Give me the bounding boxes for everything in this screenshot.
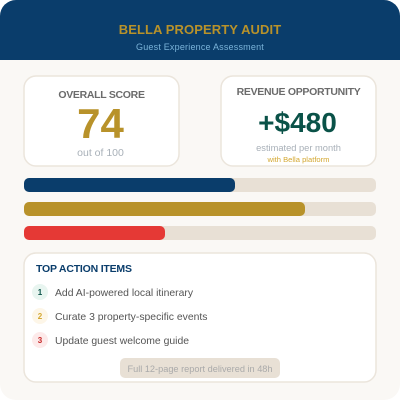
action item 3: 3 bbox=[38, 336, 42, 345]
subtitle: Guest Experience Assessment bbox=[136, 42, 264, 52]
action item 1: Add AI-powered local itinerary bbox=[55, 288, 193, 299]
revenue heading: REVENUE OPPORTUNITY bbox=[237, 86, 360, 98]
bar 1 bbox=[24, 178, 376, 192]
action item 2: 2 bbox=[38, 312, 42, 321]
action item 3: Update guest welcome guide bbox=[55, 336, 189, 347]
title: BELLA PROPERTY AUDIT bbox=[119, 22, 281, 37]
panel: top action items bbox=[23, 252, 377, 383]
report delivery note bbox=[120, 358, 280, 378]
action item 3 bbox=[32, 332, 189, 348]
bar 3 bbox=[24, 226, 376, 240]
panel: revenue opportunity bbox=[220, 75, 377, 167]
panel: overall score bbox=[23, 75, 180, 167]
action heading: TOP ACTION ITEMS bbox=[36, 263, 132, 275]
revenue value: +$480 bbox=[258, 107, 337, 138]
platform note: with Bella platform bbox=[267, 155, 330, 164]
action item 2 bbox=[32, 308, 208, 324]
action item 1 bbox=[32, 284, 193, 300]
bar 2 bbox=[24, 202, 376, 216]
revenue caption: estimated per month bbox=[256, 143, 341, 153]
score caption: out of 100 bbox=[77, 147, 124, 159]
report delivery note: Full 12-page report delivered in 48h bbox=[127, 364, 273, 374]
action item 1: 1 bbox=[38, 288, 42, 297]
score heading: OVERALL SCORE bbox=[58, 89, 145, 101]
header band bbox=[0, 0, 400, 60]
action item 2: Curate 3 property-specific events bbox=[55, 312, 207, 323]
score value: 74 bbox=[77, 100, 124, 147]
